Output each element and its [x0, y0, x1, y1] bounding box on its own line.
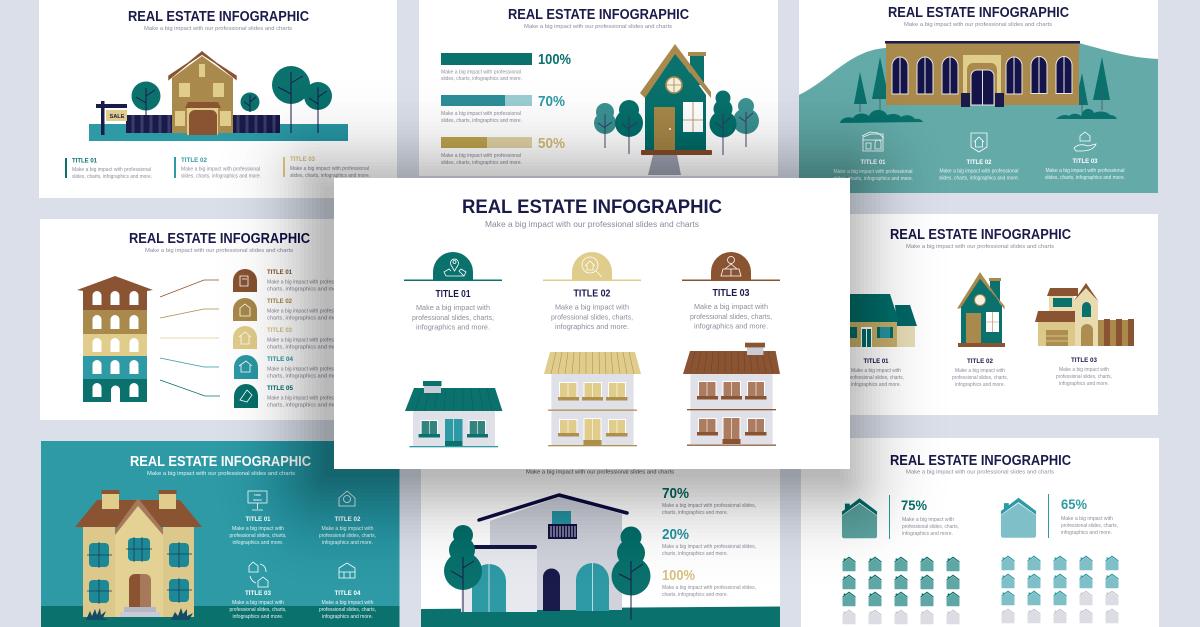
- stat 100%: 100%: [662, 568, 695, 584]
- bar 100%: [441, 51, 571, 82]
- title 03: professional slides, charts,: [1056, 374, 1112, 380]
- panel: house pictograms slide: [801, 438, 1159, 627]
- title 01: Make a big impact with professional: [72, 167, 151, 173]
- panel: progress bars slide: [419, 0, 778, 176]
- bar 100%: Make a big impact with professional: [441, 70, 521, 76]
- column 02 header: Make a big impact with: [555, 304, 629, 312]
- trees: [594, 90, 759, 155]
- item 05: [234, 384, 347, 408]
- column 01 header: [404, 252, 502, 332]
- bar 70%: Make a big impact with professional: [441, 111, 521, 117]
- panel: sale house slide: [39, 0, 397, 198]
- trees: [132, 66, 332, 133]
- item 04: [319, 563, 376, 620]
- stat 70%: Make a big impact with professional slides,: [662, 503, 756, 509]
- stat 70%: 70%: [662, 486, 689, 502]
- ground: [89, 124, 348, 141]
- item 01: infographics and more.: [232, 540, 284, 546]
- stat 65%: professional slides, charts,: [1061, 523, 1118, 529]
- item 02: TITLE 02: [334, 516, 361, 523]
- title 01: Make a big impact with: [851, 368, 901, 374]
- panel: apartment tower slide: [40, 219, 350, 420]
- trees: [444, 525, 650, 620]
- title 01: slides, charts, infographics and more.: [72, 174, 152, 180]
- stat 20%: charts, infographics and more.: [662, 551, 728, 557]
- title 02: infographics and more.: [955, 382, 1005, 388]
- bar 70%: [441, 93, 565, 124]
- item 03: TITLE 03: [245, 590, 271, 597]
- column 03 header: [682, 252, 780, 330]
- bar 50%: Make a big impact with professional: [441, 153, 521, 159]
- conifers and bushes: [840, 57, 1117, 123]
- title 02: [952, 358, 1008, 388]
- item 04: TITLE 04: [334, 590, 361, 597]
- title 03: Make a big impact with: [1059, 367, 1109, 373]
- column 02 header: professional slides, charts,: [551, 314, 633, 322]
- item 01: SOLD: [253, 498, 262, 502]
- title 03: Make a big impact with professional: [1046, 168, 1124, 174]
- panel: teal mansion slide: [41, 441, 400, 627]
- subheading: Make a big impact with our professional slides and charts: [906, 470, 1054, 476]
- panel: three houses slide: [840, 214, 1158, 415]
- tower: [77, 276, 153, 402]
- column 03 header: professional slides, charts,: [690, 314, 772, 321]
- title 01: slides, charts, infographics and more.: [833, 176, 913, 182]
- stat 100%: Make a big impact with professional slides,: [662, 585, 756, 591]
- bar 50%: 50%: [538, 135, 565, 152]
- item 01: TITLE 01: [246, 516, 271, 523]
- title 01: [65, 158, 152, 180]
- stat 70%: [662, 486, 756, 516]
- panel: hill building slide: [799, 0, 1158, 193]
- heading: REAL ESTATE INFOGRAPHIC: [890, 453, 1071, 469]
- column 01 header: TITLE 01: [436, 289, 471, 300]
- column 01 header: Make a big impact with: [416, 305, 490, 312]
- heading: REAL ESTATE INFOGRAPHIC: [462, 196, 722, 218]
- stat 75%: Make a big impact with: [902, 517, 954, 523]
- item 03: [230, 562, 286, 620]
- item 03: professional slides, charts,: [230, 607, 286, 613]
- subheading: Make a big impact with our professional slides and charts: [904, 22, 1052, 28]
- bar 50%: slides, charts, infographics and more.: [441, 160, 522, 166]
- column 02 header: [543, 252, 641, 331]
- item 03: Make a big impact with: [232, 600, 284, 606]
- title 01: TITLE 01: [864, 358, 889, 365]
- item 05: TITLE 05: [267, 385, 293, 392]
- item 01: professional slides, charts,: [230, 533, 286, 539]
- title 02: professional slides, charts,: [952, 375, 1008, 381]
- title 02: TITLE 02: [181, 157, 207, 164]
- bar 50%: [441, 135, 565, 166]
- house c: [1035, 283, 1131, 346]
- stat 65%: infographics and more.: [1061, 530, 1112, 536]
- item 04: Make a big impact with: [322, 600, 374, 606]
- item 04: [234, 355, 347, 380]
- title 01: TITLE 01: [72, 158, 97, 164]
- title 01: infographics and more.: [851, 382, 901, 388]
- item 02: TITLE 02: [267, 298, 292, 305]
- title 02: [174, 157, 261, 180]
- title 02: Make a big impact with professional: [181, 166, 260, 172]
- title 01: [848, 358, 904, 388]
- heading: REAL ESTATE INFOGRAPHIC: [508, 7, 689, 23]
- house 3: brown two-storey: [683, 343, 780, 446]
- icon: house plan: [862, 132, 884, 151]
- title 03: [1056, 357, 1112, 387]
- item 05: Make a big impact with professional: [267, 396, 347, 402]
- fence: [126, 115, 280, 133]
- stat 20%: [662, 527, 756, 557]
- center panel shadow: [216, 78, 948, 585]
- stat 65%: 65%: [1061, 496, 1088, 512]
- heading: REAL ESTATE INFOGRAPHIC: [128, 9, 309, 25]
- title 03: TITLE 03: [1071, 357, 1097, 364]
- house 2: tan two-storey: [544, 352, 641, 446]
- item 04: infographics and more.: [322, 614, 373, 620]
- house b: [958, 273, 1005, 347]
- walkway: [648, 155, 681, 175]
- hill background: [799, 43, 1158, 193]
- item 02: infographics and more.: [322, 540, 373, 546]
- title 02: slides, charts, infographics and more.: [181, 174, 261, 180]
- column 03 header: infographics and more.: [694, 324, 768, 330]
- panel: main center slide: [334, 178, 850, 469]
- building: [885, 41, 1080, 107]
- bar 100%: 100%: [538, 51, 571, 68]
- teal house: [640, 44, 712, 155]
- subheading: Make a big impact with our professional slides and charts: [524, 24, 672, 30]
- grass: [86, 608, 193, 620]
- icon: hand house: [1074, 132, 1096, 151]
- modern house: [461, 495, 627, 612]
- bar 70%: 70%: [538, 93, 565, 110]
- stat 75%: infographics and more.: [902, 531, 953, 537]
- sale sign: [96, 101, 127, 135]
- subheading: Make a big impact with our professional slides and charts: [906, 244, 1054, 250]
- title 01: [833, 159, 913, 182]
- subheading: Make a big impact with our professional slides and charts: [485, 220, 699, 229]
- item 02: professional slides, charts,: [319, 533, 376, 539]
- title 02: Make a big impact with: [955, 368, 1005, 374]
- heading: REAL ESTATE INFOGRAPHIC: [890, 227, 1071, 243]
- pictogram grid 65%: [1002, 556, 1118, 623]
- item 01: charts, infographics and more.: [267, 286, 343, 292]
- item 03: charts, infographics and more.: [267, 344, 343, 350]
- big house 75%: [842, 498, 877, 538]
- bar 70%: slides, charts, infographics and more.: [441, 118, 522, 124]
- subheading: Make a big impact with our professional slides and charts: [526, 470, 674, 476]
- item 01: Make a big impact with professional: [267, 280, 347, 286]
- title 02: Make a big impact with professional: [940, 168, 1018, 174]
- item 02: Make a big impact with: [322, 526, 374, 532]
- heading: REAL ESTATE INFOGRAPHIC: [130, 454, 311, 470]
- house 1: teal bungalow: [405, 381, 502, 447]
- stat 20%: Make a big impact with professional slides,: [662, 544, 756, 550]
- stat 75%: professional slides, charts,: [902, 524, 959, 530]
- title 03: TITLE 03: [1072, 158, 1098, 165]
- stat 70%: charts, infographics and more.: [662, 510, 728, 516]
- mansion: [75, 490, 202, 617]
- ground: [421, 606, 780, 627]
- title 03: slides, charts, infographics and more.: [290, 173, 370, 179]
- title 02: slides, charts, infographics and more.: [939, 176, 1019, 182]
- heading: REAL ESTATE INFOGRAPHIC: [888, 5, 1069, 21]
- subheading: Make a big impact with our professional slides and charts: [147, 471, 295, 477]
- item 01: [230, 491, 286, 546]
- title 03: [283, 156, 370, 179]
- item 01: TITLE 01: [267, 269, 292, 276]
- ground: [41, 606, 400, 627]
- title 03: Make a big impact with professional: [290, 166, 369, 172]
- connector lines: [160, 280, 220, 396]
- bar 100%: slides, charts, infographics and more.: [441, 76, 522, 82]
- item 01: [233, 269, 347, 292]
- subheading: Make a big impact with our professional slides and charts: [144, 26, 292, 32]
- stat 20%: 20%: [662, 527, 689, 543]
- item 04: TITLE 04: [267, 356, 293, 363]
- item 03: Make a big impact with professional: [267, 338, 347, 344]
- icon: shield house: [971, 133, 987, 152]
- title 02: [939, 159, 1019, 182]
- item 02: [233, 298, 347, 322]
- title 01: TITLE 01: [860, 159, 886, 166]
- big house 65%: [1001, 498, 1036, 538]
- column 01 header: infographics and more.: [416, 324, 490, 332]
- item 02: Make a big impact with professional: [267, 308, 347, 314]
- stat 75%: 75%: [901, 497, 928, 513]
- column 03 header: Make a big impact with: [694, 304, 768, 311]
- panel: modern house slide: [421, 468, 780, 627]
- column 03 header: TITLE 03: [712, 288, 750, 299]
- title 03: TITLE 03: [290, 156, 315, 163]
- stat 100%: [662, 568, 756, 598]
- item 03: TITLE 03: [267, 327, 292, 334]
- item 02: charts, infographics and more.: [267, 316, 343, 322]
- item 01: FOR: [254, 493, 261, 497]
- column 02 header: TITLE 02: [574, 288, 611, 300]
- item 02: [319, 491, 376, 546]
- pictogram grid 75%: [842, 556, 960, 624]
- column 02 header: infographics and more.: [555, 324, 629, 331]
- item 03: infographics and more.: [232, 614, 284, 620]
- house: [169, 52, 236, 135]
- column 01 header: professional slides, charts,: [412, 315, 494, 322]
- item 05: charts, infographics and more.: [267, 402, 343, 408]
- subheading: Make a big impact with our professional slides and charts: [145, 248, 293, 254]
- sale sign: SALE: [110, 114, 125, 120]
- title 01: Make a big impact with professional: [834, 169, 912, 175]
- item 04: professional slides, charts,: [319, 607, 376, 613]
- item 04: Make a big impact with professional: [267, 366, 347, 372]
- stat 65%: [1048, 494, 1118, 538]
- item 01: Make a big impact with: [232, 526, 284, 532]
- title 03: infographics and more.: [1059, 381, 1109, 387]
- title 02: TITLE 02: [966, 159, 992, 166]
- stat 75%: [889, 495, 959, 539]
- title 03: slides, charts, infographics and more.: [1045, 175, 1125, 181]
- heading: REAL ESTATE INFOGRAPHIC: [129, 231, 310, 247]
- stat 100%: charts, infographics and more.: [662, 592, 728, 598]
- item 04: charts, infographics and more.: [267, 374, 343, 380]
- stat 65%: Make a big impact with: [1061, 516, 1113, 522]
- title 03: [1045, 158, 1125, 181]
- item 03: [233, 326, 347, 350]
- title 01: professional slides, charts,: [848, 375, 904, 381]
- house a: [850, 294, 917, 347]
- title 02: TITLE 02: [967, 358, 993, 365]
